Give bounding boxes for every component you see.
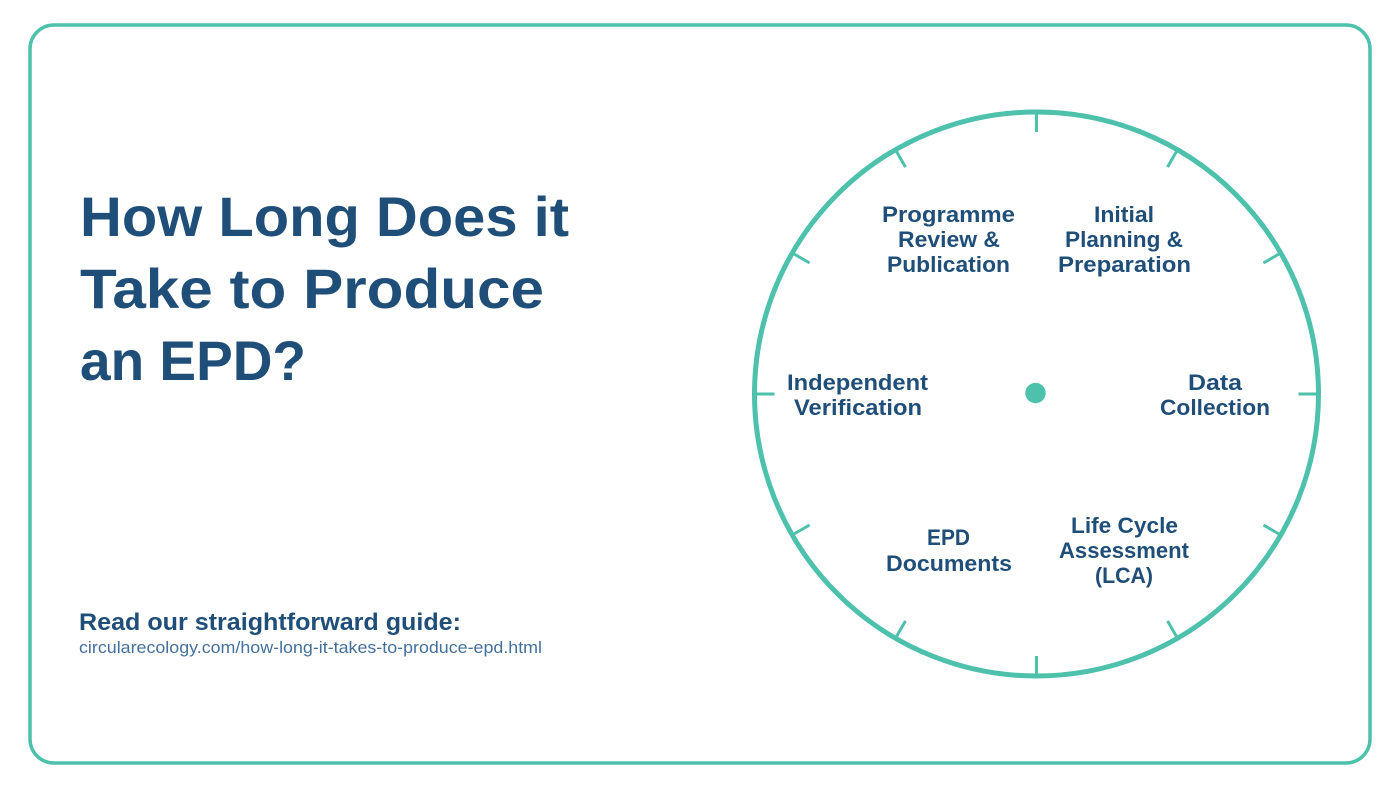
clock centre dot bbox=[1025, 383, 1046, 403]
label: programme review and publication: Review & bbox=[898, 227, 1000, 252]
label: data collection bbox=[1160, 370, 1270, 420]
clock ring bbox=[754, 112, 1318, 676]
label: initial planning and preparation bbox=[1058, 202, 1191, 277]
guide heading: Read our straightforward guide: bbox=[79, 609, 461, 636]
title bbox=[80, 185, 569, 392]
label: initial planning and preparation: Initial bbox=[1094, 202, 1154, 227]
label: life cycle assessment: Assessment bbox=[1059, 538, 1190, 563]
title: Take to Produce bbox=[80, 257, 544, 320]
clock tick marks bbox=[754, 112, 1318, 676]
label: programme review and publication bbox=[882, 202, 1015, 277]
title: How Long Does it bbox=[80, 185, 569, 248]
label: programme review and publication: Publication bbox=[887, 252, 1010, 277]
guide link: circularecology.com/how-long-it-takes-to-produce-epd.html bbox=[79, 639, 542, 657]
label: programme review and publication: Programme bbox=[882, 202, 1015, 227]
label: initial planning and preparation: Planning & bbox=[1065, 227, 1183, 252]
label: independent verification bbox=[787, 370, 929, 420]
label: data collection: Collection bbox=[1160, 395, 1270, 420]
label: life cycle assessment bbox=[1059, 513, 1190, 588]
label: EPD documents: Documents bbox=[886, 551, 1012, 576]
label: independent verification: Verification bbox=[794, 395, 922, 420]
label: life cycle assessment: (LCA) bbox=[1095, 563, 1153, 588]
guide call to action bbox=[79, 609, 542, 657]
label: initial planning and preparation: Preparation bbox=[1058, 252, 1191, 277]
label: life cycle assessment: Life Cycle bbox=[1071, 513, 1178, 538]
label: EPD documents: EPD bbox=[927, 525, 970, 550]
title: an EPD? bbox=[80, 329, 306, 392]
label: data collection: Data bbox=[1188, 370, 1243, 395]
label: EPD documents bbox=[886, 525, 1012, 576]
label: independent verification: Independent bbox=[787, 370, 929, 395]
chart: EPD process clock bbox=[754, 112, 1318, 676]
